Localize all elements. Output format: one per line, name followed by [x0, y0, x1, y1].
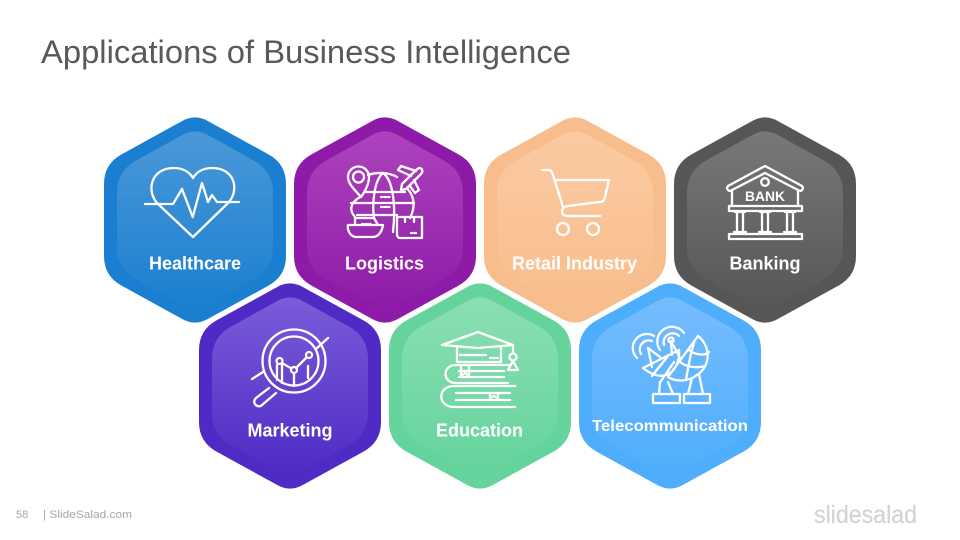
- title: Applications of Business Intelligence: [41, 34, 571, 70]
- panel: logistics: [294, 117, 476, 323]
- icon: bank building: [727, 166, 803, 239]
- panel: education: [389, 283, 571, 489]
- panel: retail industry: [484, 117, 666, 323]
- label: retail industry: Retail Industry: [512, 254, 637, 274]
- footer: page number and site: 58: [16, 509, 28, 521]
- icon: bank building: BANK: [745, 188, 785, 204]
- icon: satellite dishes: [633, 327, 710, 403]
- panel: marketing: [199, 283, 381, 489]
- icon: magnifier with chart: [252, 330, 328, 406]
- label: banking: Banking: [729, 254, 801, 274]
- panel: healthcare: [104, 117, 286, 323]
- label: logistics: Logistics: [345, 254, 424, 274]
- label: marketing: Marketing: [247, 420, 333, 440]
- icon: heart with pulse: [145, 168, 239, 237]
- label: telecommunication: Telecommunication: [592, 418, 748, 435]
- icon: graduation cap on books: [441, 332, 518, 407]
- icon: globe, pin, plane, ship, box: [348, 166, 422, 238]
- footer: page number and site: | SlideSalad.com: [43, 509, 132, 521]
- icon: shopping cart: [542, 170, 609, 235]
- label: healthcare: Healthcare: [149, 254, 241, 274]
- label: education: Education: [436, 420, 523, 440]
- panel: telecommunication: [579, 283, 761, 489]
- logo: slidesalad: slidesalad: [814, 501, 917, 529]
- panel: banking: [674, 117, 856, 323]
